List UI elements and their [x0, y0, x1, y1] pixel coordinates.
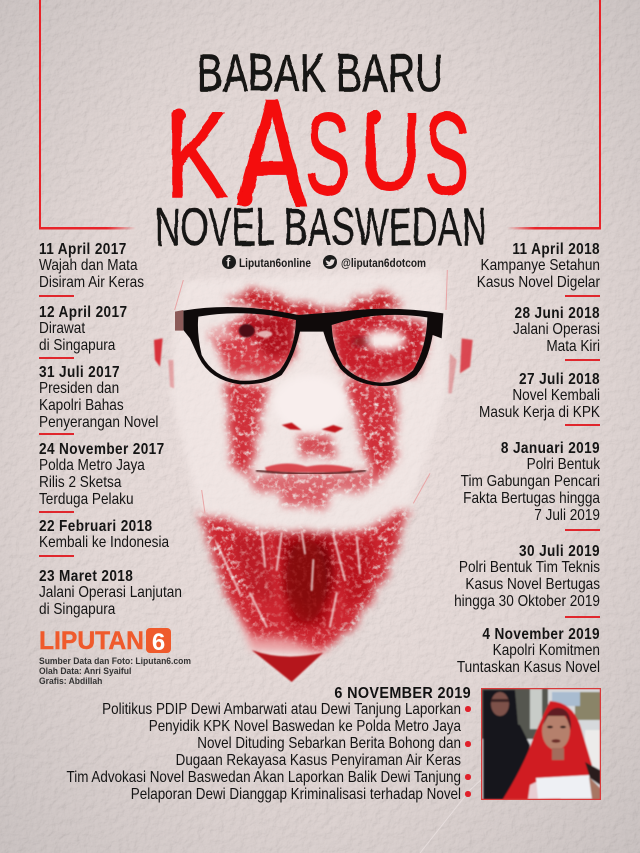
entry: 11 April 2017: 11 April 2017: [39, 240, 127, 258]
entry: 23 Maret 2018: di Singapura: [39, 601, 115, 618]
entry: 12 April 2017: Dirawat: [39, 320, 85, 337]
beard strokes: [217, 532, 360, 627]
right eye highlight: [364, 329, 406, 351]
title: Kasus: [165, 69, 469, 237]
entry: 27 Juli 2018: Novel Kembali: [512, 387, 600, 404]
bullet list: Pelaporan Dewi Dianggap Kriminalisasi terhadap Novel: [131, 786, 461, 803]
entry: 11 April 2017: Wajah dan Mata: [39, 257, 138, 274]
entry: 8 Januari 2019: 7 Juli 2019: [534, 507, 600, 524]
title: Kasus: A: [238, 69, 305, 237]
entry: 24 November 2017: Rilis 2 Sketsa: [39, 474, 121, 491]
entry: 8 Januari 2019: Tim Gabungan Pencari: [461, 473, 600, 490]
entry: 22 Februari 2018: 22 Februari 2018: [39, 518, 152, 534]
entry: 30 Juli 2019: hingga 30 Oktober 2019: [454, 593, 600, 610]
entry: 8 Januari 2019: 8 Januari 2019: [501, 440, 600, 456]
social media handles: [222, 255, 426, 270]
entry: 31 Juli 2017: Presiden dan: [39, 380, 119, 397]
source credits: Grafis: Abdillah: [39, 676, 102, 687]
entry: 11 April 2017: [39, 240, 144, 291]
nostrils: [282, 423, 343, 433]
entry: 8 Januari 2019: Fakta Bertugas hingga: [463, 490, 600, 507]
entry: 28 Juni 2018: Jalani Operasi: [513, 321, 600, 338]
dark beard core: [286, 538, 327, 622]
entry: 12 April 2017: 12 April 2017: [39, 304, 127, 320]
bullet list: Dugaan Rekayasa Kasus Penyiraman Air Keras: [176, 752, 461, 769]
entry: 27 Juli 2018: Masuk Kerja di KPK: [479, 404, 600, 421]
entry: 4 November 2019: [457, 626, 600, 676]
entry: 24 November 2017: Polda Metro Jaya: [39, 457, 145, 474]
entry: 11 April 2018: [477, 240, 600, 291]
entry: 24 November 2017: [39, 440, 165, 508]
entry: 8 Januari 2019: Polri Bentuk: [527, 456, 600, 473]
entry: 8 Januari 2019: [460, 440, 600, 524]
chin tip: [252, 650, 323, 682]
pale face base: [170, 270, 447, 682]
bullet list: Tim Advokasi Novel Baswedan Akan Laporkan Balik Dewi Tanjung: [67, 769, 461, 786]
bullet list: [66, 701, 461, 803]
entry: 22 Februari 2018: [39, 518, 170, 551]
entry: 31 Juli 2017: [39, 364, 158, 431]
left eye: [239, 324, 255, 337]
entry: 30 Juli 2019: [454, 542, 600, 610]
entry: 31 Juli 2017: Kapolri Bahas: [39, 397, 124, 414]
bullet list: Politikus PDIP Dewi Ambarwati atau Dewi Tanjung Laporkan: [102, 701, 461, 718]
entry: 27 Juli 2018: [479, 370, 600, 421]
lower chin pink wash: [230, 593, 357, 653]
title: Kasus: S: [425, 89, 469, 221]
source credits: [39, 656, 191, 687]
Liputan6 logo: LIPUTAN: [39, 627, 144, 655]
right timeline: [454, 240, 600, 676]
heading: 6 November 2019: 6 NOVEMBER 2019: [334, 685, 471, 702]
entry: 23 Maret 2018: [39, 568, 182, 618]
entry: 11 April 2018: Kasus Novel Digelar: [477, 274, 600, 291]
entry: 23 Maret 2018: 23 Maret 2018: [39, 568, 133, 584]
glasses: [175, 307, 443, 386]
entry: 22 Februari 2018: Kembali ke Indonesia: [39, 534, 169, 551]
solid underpaint: [227, 318, 417, 630]
left timeline: [39, 240, 182, 618]
Liputan6 logo: 6: [152, 629, 165, 656]
entry: 11 April 2018: 11 April 2018: [512, 240, 600, 258]
entry: 30 Juli 2019: Kasus Novel Bertugas: [465, 576, 600, 593]
entry: 28 Juni 2018: [513, 304, 600, 355]
title: Babak Baru: BABAK BARU: [197, 44, 443, 103]
social media handles: Liputan6online: [239, 258, 311, 270]
entry: 12 April 2017: [39, 304, 127, 354]
entry: 30 Juli 2019: 30 Juli 2019: [519, 542, 600, 560]
entry: 4 November 2019: Kapolri Komitmen: [493, 642, 600, 659]
entry: 12 April 2017: di Singapura: [39, 337, 115, 354]
nose highlight: [273, 375, 347, 432]
entry: 4 November 2019: 4 November 2019: [482, 626, 600, 642]
entry: 11 April 2017: Disiram Air Keras: [39, 274, 144, 291]
title: Kasus: K: [165, 88, 228, 224]
entry: 31 Juli 2017: 31 Juli 2017: [39, 364, 120, 380]
6 November 2019 block: [66, 685, 471, 803]
social media handles: f: [226, 256, 231, 270]
entry: 27 Juli 2018: 27 Juli 2018: [519, 370, 600, 388]
entry: 28 Juni 2018: Mata Kiri: [546, 338, 600, 355]
ears: [154, 338, 473, 393]
entry: 24 November 2017: 24 November 2017: [39, 440, 165, 458]
title: Kasus: S: [306, 89, 350, 221]
entry: 4 November 2019: Tuntaskan Kasus Novel: [457, 659, 600, 676]
entry: 24 November 2017: Terduga Pelaku: [39, 491, 134, 508]
entry: 28 Juni 2018: 28 Juni 2018: [515, 304, 600, 322]
title: Novel Baswedan: NOVEL BASWEDAN: [155, 198, 487, 257]
head outline: [175, 270, 447, 513]
painted facial shadows: [200, 288, 428, 650]
photo of Dewi Tanjung: [481, 688, 601, 800]
bullet list: Penyidik KPK Novel Baswedan ke Polda Metro Jaya: [149, 718, 461, 735]
source credits: Olah Data: Anri Syaiful: [39, 666, 131, 677]
mouth: [265, 463, 353, 473]
entry: 23 Maret 2018: Jalani Operasi Lanjutan: [39, 584, 182, 601]
source credits: Sumber Data dan Foto: Liputan6.com: [39, 656, 191, 666]
bullet list: Novel Dituding Sebarkan Berita Bohong dan: [197, 735, 461, 752]
red title frame: [39, 0, 601, 230]
portrait illustration of Novel Baswedan: [154, 270, 473, 682]
title: Kasus: U: [360, 90, 421, 215]
entry: 11 April 2018: Kampanye Setahun: [481, 257, 600, 274]
entry: 30 Juli 2019: Polri Bentuk Tim Teknis: [459, 559, 600, 576]
entry: 31 Juli 2017: Penyerangan Novel: [39, 414, 158, 431]
social media handles: @liputan6dotcom: [341, 258, 426, 270]
